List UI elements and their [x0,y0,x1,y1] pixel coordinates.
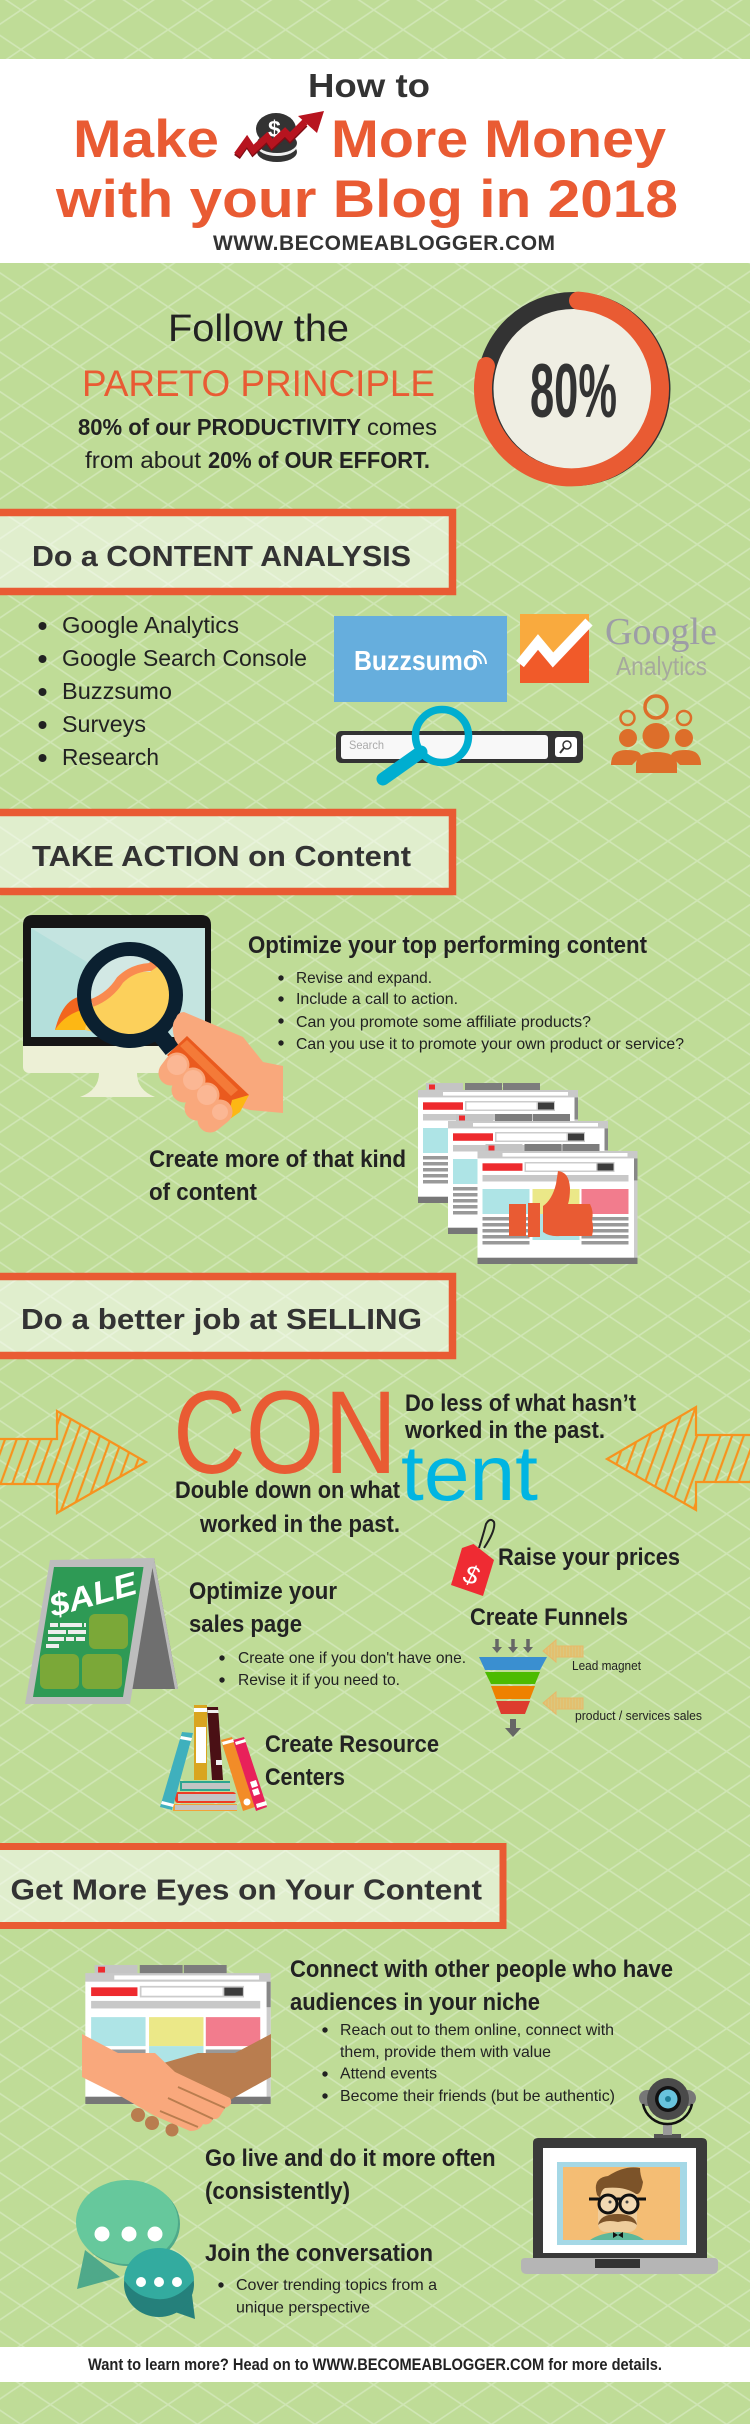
text block: 80/20 description: 20% of OUR EFFORT. [208,447,430,473]
text block: 80/20 description: comes [367,414,437,440]
text block: connect with others: audiences in your niche [290,1989,540,2016]
heading box: Do a CONTENT ANALYSIS [32,541,411,573]
panel: Get more eyes on your content [0,1846,718,2319]
icon: search bar with magnifier [336,710,583,779]
heading box [0,512,452,592]
text block: do less [404,1390,636,1444]
icon: browser with handshake [82,1965,271,2136]
text: create resource centers [265,1731,439,1791]
icon: Google Analytics logo [520,611,717,683]
footer band [0,2347,750,2382]
text block: optimize sales page: Revise it if you need to. [238,1672,400,1689]
heading box: Get More Eyes on Your Content [10,1874,482,1906]
text: create funnels: Create Funnels [470,1604,628,1631]
panel: Do a better job at selling [0,1276,750,1811]
text block: go live [205,2145,496,2205]
arrow: product sales [543,1692,583,1714]
text block: optimize top content [248,932,684,1053]
icon: sales funnel [479,1639,547,1737]
chart: 80 percent donut: 80% [530,349,617,434]
text block: optimize top content: Can you promote some affiliate products? [296,1014,591,1031]
bullet list: tools: Surveys [62,711,146,737]
icon: Google Analytics logo: Google [605,611,717,653]
icon: books [160,1705,267,1811]
heading box: Do a better job at SELLING [21,1304,422,1336]
title line: Make: Make [73,110,219,169]
word: CON: CON [173,1367,397,1499]
text block: join the conversation: Join the conversation [205,2240,433,2267]
text block: connect with others [290,1956,673,2105]
text block: join the conversation: Cover trending topics from a [236,2277,437,2294]
text block: optimize top content: Optimize your top performing content [248,932,647,959]
text block: create more content: of content [149,1179,257,1206]
icon: price tag [451,1520,494,1596]
text block: 80/20 description: from about [85,447,202,473]
icon: coins and rising arrow: $ [268,116,281,142]
text block: double down [175,1477,400,1538]
text: product sales: product / services sales [575,1709,702,1723]
text block: optimize top content: Revise and expand. [296,970,432,987]
text block: optimize sales page: Optimize your [189,1578,337,1605]
icon: sale sign [25,1558,178,1704]
text block: 80/20 description [78,414,437,473]
text block: double down: Double down on what [175,1477,400,1504]
text: create resource centers: Create Resource [265,1731,439,1758]
arrow: left striped [0,1411,146,1513]
heading: Follow the: Follow the [168,308,349,350]
icon: monitor with magnifier and hand [23,915,283,1121]
title line: How to: How to [308,67,430,104]
icon: laptop with video call [521,2138,718,2274]
icon: group of people [611,696,701,773]
bullet list: tools: Research [62,744,159,770]
heading box [0,1276,452,1356]
text block: double down: worked in the past. [199,1511,400,1538]
arrow: lead magnet [543,1640,583,1662]
icon: Buzzsumo logo: Buzzsumo [354,645,478,676]
title line: with your Blog in 2018: with your Blog in 2018 [55,170,678,229]
text block: join the conversation: unique perspective [236,2300,370,2316]
heading box [0,812,452,892]
text: lead magnet: Lead magnet [572,1659,641,1673]
text: create resource centers: Centers [265,1764,345,1791]
panel: Take action on content [0,812,684,1264]
word: tent: tent [401,1429,538,1517]
text: raise your prices: Raise your prices [498,1544,680,1571]
text block: create more content [149,1146,406,1206]
bullet list: tools: Buzzsumo [62,678,172,704]
text block: connect with others: Become their friends (but be authentic) [340,2088,615,2105]
text block: do less: worked in the past. [404,1417,605,1444]
text block: optimize sales page: Create one if you don't have one. [238,1650,466,1667]
text block: optimize sales page [189,1578,466,1689]
header band [0,59,750,263]
heading box: TAKE ACTION on Content [32,841,411,873]
panel: Do a content analysis [0,512,717,779]
bullet list: tools: Google Analytics [62,612,239,638]
heading: Pareto principle: PARETO PRINCIPLE [82,363,435,404]
arrow: right striped [607,1407,750,1510]
text block: do less: Do less of what hasn’t [405,1390,636,1417]
icon: Buzzsumo logo [334,616,507,702]
text block: optimize sales page: sales page [189,1611,302,1638]
text block: connect with others: Reach out to them online, connect with [340,2022,614,2039]
icon: stacked browser windows with thumbs up [418,1083,638,1264]
title line: More Money: More Money [331,110,667,169]
text block: join the conversation [205,2240,437,2316]
text block: connect with others: Connect with other people who have [290,1956,673,1983]
panel: Pareto principle [78,300,662,478]
icon: sale sign: $ALE [44,1565,142,1624]
text block: connect with others: them, provide them with value [340,2044,551,2061]
icon: webcam [639,2078,696,2138]
text block: optimize top content: Include a call to action. [296,991,458,1008]
chart: 80 percent donut [483,300,662,478]
text block: optimize top content: Can you use it to promote your own product or service? [296,1036,684,1053]
text block: go live: (consistently) [205,2178,350,2205]
text block: 80/20 description: 80% of our PRODUCTIVITY [78,414,361,440]
bullet list: tools: Google Search Console [62,645,307,671]
text block: connect with others: Attend events [340,2066,437,2082]
icon: coins and rising arrow [237,111,324,162]
icon: Google Analytics logo: Analytics [616,651,707,681]
website address: WWW.BECOMEABLOGGER.COM [213,232,555,255]
icon: search bar with magnifier: Search [349,738,384,752]
icon: chat bubbles [76,2180,195,2319]
text block: create more content: Create more of that kind [149,1146,406,1173]
footer band: Want to learn more? Head on to WWW.BECOMEABLOGGER.COM for more details. [88,2356,662,2374]
heading box [0,1846,503,1926]
text block: go live: Go live and do it more often [205,2145,496,2172]
icon: price tag: $ [459,1558,483,1591]
bullet list: tools [38,612,307,770]
